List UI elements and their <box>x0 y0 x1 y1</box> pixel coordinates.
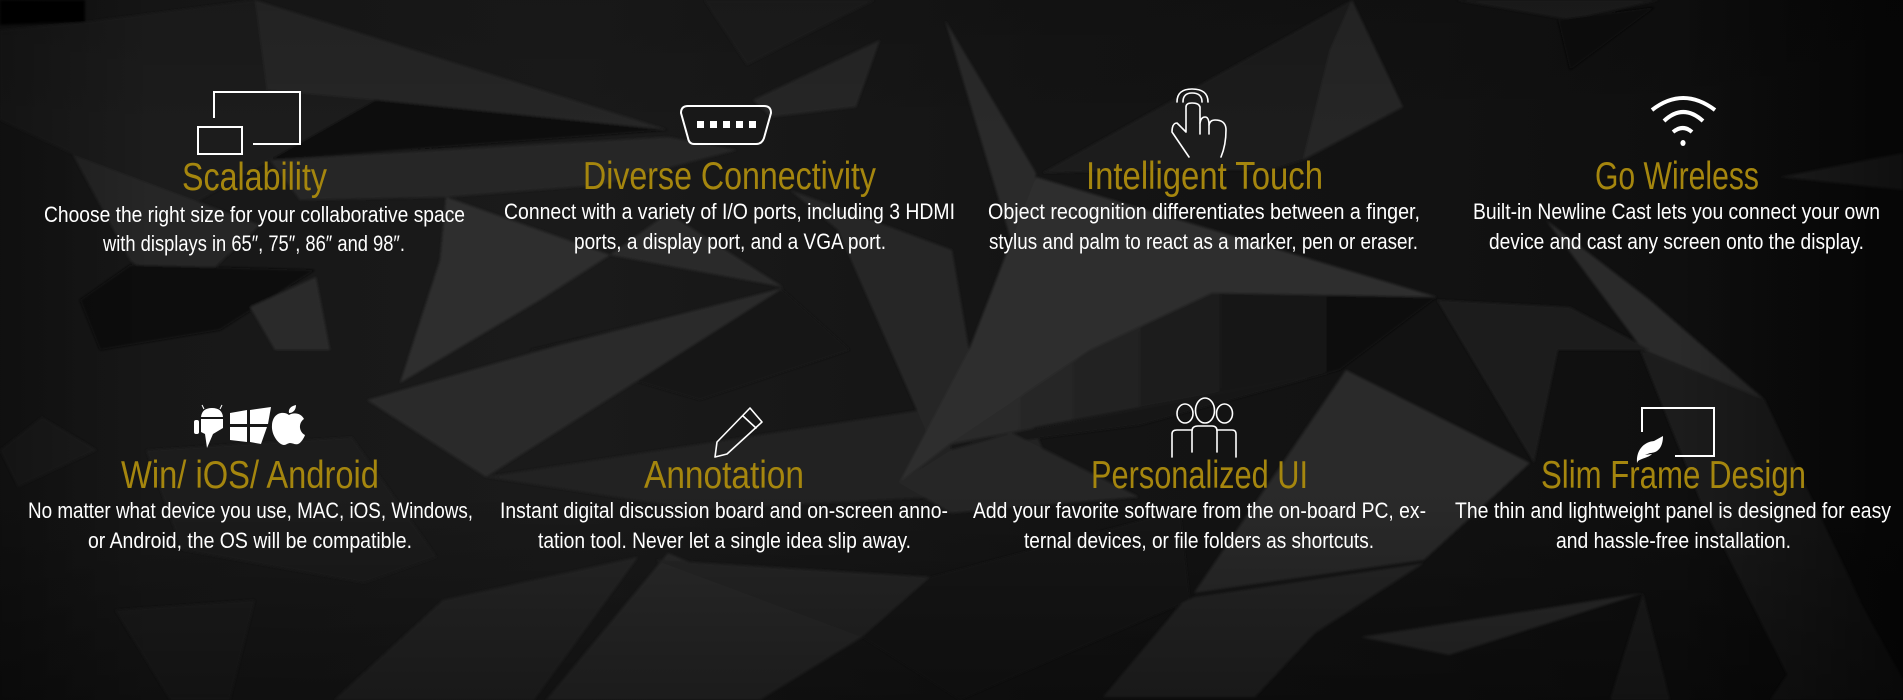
text: Diverse Connectivity description: ports, a display port, and a VGA port. <box>574 229 886 254</box>
text: Win/ iOS/ Android description <box>28 498 473 553</box>
text: Annotation description: tation tool. Never let a single idea slip away. <box>538 528 911 553</box>
text: Intelligent Touch description: Object recognition differentiates between a finger, <box>988 199 1420 224</box>
text: Annotation description: Instant digital discussion board and on-screen anno- <box>500 498 948 523</box>
heading: Go Wireless: Go Wireless <box>1595 155 1759 198</box>
text: Diverse Connectivity description: Connect with a variety of I/O ports, including 3 HDMI <box>504 199 955 224</box>
icon: touching hand <box>1172 89 1226 157</box>
text: Scalability description <box>44 202 465 256</box>
heading: Win/ iOS/ Android: Win/ iOS/ Android <box>121 454 379 497</box>
heading: Slim Frame Design: Slim Frame Design <box>1541 454 1806 497</box>
text: Intelligent Touch description <box>988 199 1420 254</box>
text: Annotation description <box>500 498 948 553</box>
text: Intelligent Touch description: stylus and palm to react as a marker, pen or eraser. <box>989 229 1418 254</box>
panel: Scalability <box>44 92 465 256</box>
text: Personalized UI description: Add your favorite software from the on-board PC, ex- <box>973 498 1426 523</box>
icon: three people <box>1172 398 1236 457</box>
heading: Diverse Connectivity: Diverse Connectivity <box>583 155 877 198</box>
panel: Intelligent Touch <box>988 89 1420 254</box>
text: Win/ iOS/ Android description: No matter what device you use, MAC, iOS, Windows, <box>28 498 473 523</box>
heading: Scalability: Scalability <box>182 156 328 199</box>
text: Personalized UI description: ternal devices, or file folders as shortcuts. <box>1024 528 1374 553</box>
text: Slim Frame Design description <box>1455 498 1891 553</box>
panel: Annotation <box>500 408 948 553</box>
text: Slim Frame Design description: and hassle-free installation. <box>1556 528 1791 553</box>
text: Win/ iOS/ Android description: or Android, the OS will be compatible. <box>88 528 412 553</box>
icon: wifi <box>1652 98 1715 146</box>
icon: OS logos <box>194 405 305 448</box>
text: Personalized UI description <box>973 498 1426 553</box>
icon: thin frame and feather <box>1637 408 1714 463</box>
icon: pencil <box>715 408 762 457</box>
icon: VGA port <box>681 106 771 144</box>
panel: Win/ iOS/ Android <box>28 405 473 553</box>
heading: Intelligent Touch: Intelligent Touch <box>1086 155 1323 198</box>
text: Go Wireless description <box>1473 199 1880 254</box>
heading: Annotation: Annotation <box>644 454 804 497</box>
text: Scalability description: with displays in 65″, 75″, 86″ and 98″. <box>102 231 405 256</box>
panel: Personalized UI <box>973 398 1426 553</box>
panel: Slim Frame Design <box>1455 408 1891 553</box>
text: Scalability description: Choose the right size for your collaborative space <box>44 202 465 227</box>
heading: Personalized UI: Personalized UI <box>1091 454 1308 497</box>
icon: two screens <box>198 92 300 154</box>
text: Diverse Connectivity description <box>504 199 955 254</box>
panel: Go Wireless <box>1473 98 1880 254</box>
panel: Diverse Connectivity <box>504 106 955 254</box>
